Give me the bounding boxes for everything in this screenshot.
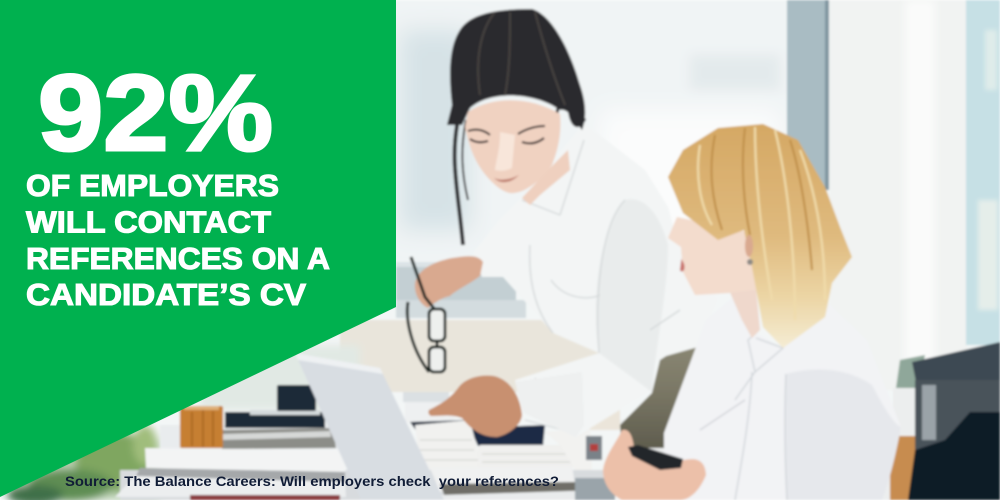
face [668,217,756,295]
statement text: WILL CONTACT [26,204,271,240]
white blouse [473,123,718,437]
neck [729,288,760,338]
face [465,100,560,193]
wooden block [180,406,223,448]
standing woman with dark hair [407,9,718,448]
statement text: REFERENCES ON A [26,241,330,276]
green banner [0,0,396,497]
neck [522,150,570,205]
hand with phone [603,430,706,500]
statement text: OF EMPLOYERS [26,168,279,203]
statement text [26,168,330,312]
source line: Source: The Balance Careers: Will employers check your references? [65,473,559,489]
glasses [407,257,445,372]
desk with papers [115,385,615,500]
pointing hand [428,376,522,437]
right side printer and chair [890,342,1000,500]
skirt [620,330,706,448]
left hand [415,256,483,308]
ear and earring [745,235,753,257]
big stat: 92%: 92% [38,52,273,173]
seated blonde woman [603,124,901,500]
cuff [515,372,584,437]
plant in lower left [7,425,160,500]
laptop [295,353,444,500]
white shirt [664,297,901,500]
hair [668,124,852,348]
statement text: CANDIDATE’S CV [26,277,306,312]
hair [447,9,585,245]
